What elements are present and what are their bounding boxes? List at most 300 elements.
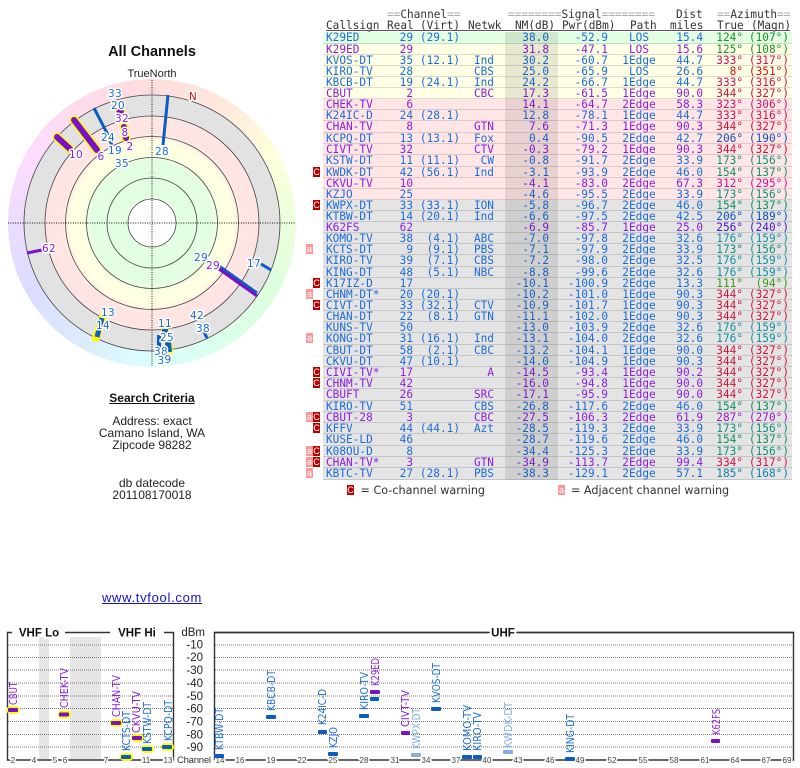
- row: KWDK-DT: (137°): [749, 166, 789, 179]
- row: CHNM-DT*: 20: [400, 288, 413, 301]
- row: KIRO-TV 51: -26.8: [516, 400, 549, 413]
- row: KZJO: [323, 189, 792, 200]
- row: KVOS-DT: [323, 55, 792, 66]
- row: CKVU-DT: -14.0: [516, 355, 549, 368]
- row: CIVI-TV*: 17: [400, 366, 413, 379]
- row: CIVT-DT: 344°: [716, 299, 743, 312]
- row: CIVI-TV*: -14.5: [516, 366, 549, 379]
- row: KBCB-DT: 19: [400, 76, 413, 89]
- row: KOMO-TV: [323, 233, 792, 244]
- dBm axis: [181, 627, 205, 754]
- row: K62FS: (240°): [749, 221, 789, 234]
- row: CBUT: CBUT: [326, 87, 353, 100]
- row: KSTW-DT: [323, 155, 792, 167]
- row: KUNS-TV: (159°): [749, 321, 789, 334]
- db datecode: [112, 476, 192, 502]
- row: KIRO-TV 51: 154°: [716, 400, 743, 413]
- row: KVOS-DT: 1Edge: [622, 54, 656, 67]
- row: CBUFT: 26: [400, 388, 413, 401]
- row: KING-DT: 2Edge: [622, 266, 656, 279]
- row: K29ED blue: [323, 32, 792, 44]
- row: K29ED purple: -47.1: [575, 43, 608, 56]
- station labels: KCPQ-DT: [162, 700, 175, 741]
- row: KFFV: 44: [400, 422, 413, 435]
- row: KBTC-TV: (168°): [749, 467, 789, 480]
- dBm axis: -20: [186, 652, 203, 664]
- channel axis: 4: [32, 756, 37, 765]
- row: KIRO-TV 39: 2Edge: [622, 254, 656, 267]
- row: KVOS-DT: 333°: [716, 54, 743, 67]
- row: KWPX-DT: (33.1): [420, 199, 460, 212]
- row: KOMO-TV: 2Edge: [622, 232, 656, 245]
- row: KSTW-DT: KSTW-DT: [326, 154, 373, 167]
- channel axis: 22: [298, 756, 307, 765]
- row: CKVU-TV: [323, 178, 792, 189]
- row: KIRO-TV 39: (159°): [749, 254, 789, 267]
- bar labels: 42: [190, 310, 204, 322]
- row: CBUT: 2: [406, 87, 413, 100]
- row: CIVT-TV: (327°): [749, 143, 789, 156]
- row: KTBW-DT: -97.5: [575, 210, 608, 223]
- bar labels: 38: [154, 346, 168, 358]
- row: KCPQ-DT: -90.5: [575, 132, 608, 145]
- row: KONG-DT: [323, 333, 792, 345]
- channel table: a: [307, 457, 312, 467]
- row: CHAN-TV*: GTN: [474, 456, 494, 469]
- row: CHEK-TV: 2Edge: [622, 98, 656, 111]
- channel table: a: [307, 289, 312, 299]
- row: CBUT-28: -27.5: [516, 411, 549, 424]
- row: KBCB-DT: 24.2: [522, 76, 549, 89]
- row: KUNS-TV: -13.0: [516, 321, 549, 334]
- row: KIRO-TV 39: 39: [400, 254, 413, 267]
- row: CBUT-28: -106.3: [568, 411, 608, 424]
- row: KCTS-DT: 9: [406, 243, 413, 256]
- row: KBCB-DT: Ind: [474, 76, 494, 89]
- row: CBUT: 90.0: [676, 87, 703, 100]
- bar labels: 28: [155, 146, 169, 158]
- row: CKVU-TV: -83.0: [575, 177, 608, 190]
- row: KUNS-TV: 176°: [716, 321, 743, 334]
- channel table: C: [313, 412, 320, 422]
- row: CIVI-TV*: 344°: [716, 366, 743, 379]
- row: CHAN-DT: 1Edge: [622, 310, 656, 323]
- row: KZJO: -4.6: [522, 188, 549, 201]
- table header: ========Signal========: [508, 8, 655, 21]
- dBm axis: -90: [186, 742, 203, 754]
- row: KWDK-DT: 154°: [716, 166, 743, 179]
- row: CHNM-TV: [323, 378, 792, 389]
- row: KWPX-DT: 46.0: [676, 199, 703, 212]
- row: KONG-DT: (159°): [749, 332, 789, 345]
- bar labels: 10: [69, 149, 83, 161]
- row: KSTW-DT: 2Edge: [622, 154, 656, 167]
- row: KIRO-TV 51: 51: [400, 400, 413, 413]
- db datecode: 201108170018: [112, 488, 192, 502]
- table header: Real: [387, 19, 414, 32]
- channel table: a: [307, 244, 312, 254]
- row: KWDK-DT: (56.1): [420, 166, 460, 179]
- row: CKVU-TV: (295°): [749, 177, 789, 190]
- row: CHNM-TV: 42: [400, 377, 413, 390]
- row: K17IZ-D: (94°): [756, 277, 789, 290]
- row: KWDK-DT: 46.0: [676, 166, 703, 179]
- row: CBUT: [323, 88, 792, 99]
- channel table: C: [313, 446, 320, 456]
- row: KVOS-DT: Ind: [474, 54, 494, 67]
- row: KIRO-TV 28: CBS: [474, 65, 494, 78]
- row: CHNM-TV: -94.8: [575, 377, 608, 390]
- station labels: CIVT-TV: [399, 690, 412, 727]
- channel axis: 25: [329, 756, 338, 765]
- row: KCPQ-DT: (190°): [749, 132, 789, 145]
- row: KWPX-DT: -5.8: [522, 199, 549, 212]
- row: CHAN-TV: 90.3: [676, 120, 703, 133]
- row: CIVT-TV: [323, 144, 792, 155]
- row: K24IC-D: 333°: [716, 109, 743, 122]
- row: CBUFT: CBUFT: [326, 388, 359, 401]
- row: CBUT-28: 61.9: [676, 411, 703, 424]
- row: KONG-DT: 176°: [716, 332, 743, 345]
- row: CHNM-TV: (327°): [749, 377, 789, 390]
- row: KCTS-DT: PBS: [474, 243, 494, 256]
- row: CIVT-DT: [323, 300, 792, 311]
- row: K62FS: 1Edge: [622, 221, 656, 234]
- row: CBUT-DT: 1Edge: [622, 344, 656, 357]
- row: CIVI-TV*: CIVI-TV*: [326, 366, 379, 379]
- table header: Dist: [676, 8, 703, 21]
- dBm axis: -80: [186, 730, 203, 742]
- row: K29ED blue: K29ED: [326, 31, 359, 44]
- row: K08OU-D: 2Edge: [622, 445, 656, 458]
- row: KCPQ-DT: 206°: [716, 132, 743, 145]
- row: CBUFT: -17.1: [516, 388, 549, 401]
- channel axis: 52: [608, 756, 617, 765]
- label: TrueNorth: TrueNorth: [127, 68, 177, 80]
- row: CKVU-DT: [323, 356, 792, 367]
- row: K29ED purple: 15.6: [676, 43, 703, 56]
- channel axis: 13: [164, 756, 173, 765]
- db datecode: db datecode: [119, 476, 185, 490]
- row: KUSE-LD: 46: [400, 433, 413, 446]
- row: KBTC-TV: 2Edge: [622, 467, 656, 480]
- row: KIRO-TV 28: 25.0: [522, 65, 549, 78]
- row: KING-DT: [323, 267, 792, 278]
- row: CBUT: 344°: [716, 87, 743, 100]
- row: KSTW-DT: 33.9: [676, 154, 703, 167]
- row: KONG-DT: Ind: [474, 332, 494, 345]
- row: CBUT-28: 287°: [716, 411, 743, 424]
- station labels: KZJO: [327, 727, 340, 748]
- bar labels: 11: [158, 318, 172, 330]
- bar labels: 32: [115, 113, 129, 125]
- row: KIRO-TV 39: -98.0: [575, 254, 608, 267]
- row: KSTW-DT: (156°): [749, 154, 789, 167]
- row: KTBW-DT: [323, 211, 792, 222]
- row: CKVU-DT: 47: [400, 355, 413, 368]
- table header: Netwk: [468, 19, 501, 32]
- row: CHAN-DT: [323, 311, 792, 322]
- station labels: KIRO-TV: [358, 672, 371, 710]
- row: KVOS-DT: (12.1): [420, 54, 460, 67]
- channel axis: 31: [391, 756, 400, 765]
- row: K24IC-D: [323, 110, 792, 121]
- bar labels: N: [189, 91, 197, 103]
- row: KCTS-DT: (9.1): [427, 243, 460, 256]
- row: KZJO: -95.5: [575, 188, 608, 201]
- row: KVOS-DT: (317°): [749, 54, 789, 67]
- row: KBCB-DT: (316°): [749, 76, 789, 89]
- row: KCTS-DT: -97.9: [575, 243, 608, 256]
- row: KBTC-TV: -38.3: [516, 467, 549, 480]
- row: KUSE-LD: -28.7: [516, 433, 549, 446]
- row: CHAN-TV*: 2Edge: [622, 456, 656, 469]
- row: KIRO-TV 39: -7.2: [522, 254, 549, 267]
- address block: Address: exact: [112, 414, 192, 428]
- row: K08OU-D: -125.3: [568, 445, 608, 458]
- row: KIRO-TV 51: KIRO-TV: [326, 400, 373, 413]
- row: K17IZ-D: [323, 278, 792, 289]
- row: CBUT: CBC: [474, 87, 494, 100]
- station markers: [121, 697, 575, 761]
- row: CHAN-TV: 8: [406, 120, 413, 133]
- link: tvfool: www.tvfool.com: [102, 590, 202, 605]
- row: KUNS-TV: KUNS-TV: [326, 321, 373, 334]
- row: CHAN-DT: 22: [400, 310, 413, 323]
- row: K24IC-D: 44.7: [676, 109, 703, 122]
- channel axis: 34: [422, 756, 431, 765]
- channel table: a: [307, 333, 312, 343]
- row: K17IZ-D: 17: [400, 277, 413, 290]
- row: KBCB-DT: KBCB-DT: [326, 76, 373, 89]
- row: KCPQ-DT: KCPQ-DT: [326, 132, 373, 145]
- row: CIVT-DT: CIVT-DT: [326, 299, 373, 312]
- row: CHAN-DT: 90.3: [676, 310, 703, 323]
- row: KIRO-TV 39: (7.1): [427, 254, 460, 267]
- row: CHEK-TV: 323°: [716, 98, 743, 111]
- NM column shading: [505, 32, 558, 480]
- row: KVOS-DT: -60.7: [575, 54, 608, 67]
- row: CHEK-TV: [323, 99, 792, 110]
- channel axis: 58: [670, 756, 679, 765]
- table header: True: [717, 19, 744, 32]
- band titles: [19, 628, 515, 640]
- row: CHNM-DT*: 1Edge: [622, 288, 656, 301]
- legend: co-channel warning: = Co-channel warning: [361, 484, 485, 497]
- row: K29ED blue: LOS: [629, 31, 649, 44]
- row: K17IZ-D: -10.1: [516, 277, 549, 290]
- row: KIRO-TV 39: 176°: [716, 254, 743, 267]
- row: K17IZ-D: 111°: [716, 277, 743, 290]
- station labels: KWPX-DT: [410, 708, 423, 749]
- row: CBUT-28: CBC: [474, 411, 494, 424]
- channel table: a: [307, 412, 312, 422]
- row: CHAN-TV: 7.6: [529, 120, 549, 133]
- row: K17IZ-D: K17IZ-D: [326, 277, 373, 290]
- dBm axis: -50: [186, 691, 203, 703]
- row: CBUFT: 90.0: [676, 388, 703, 401]
- row: K24IC-D: 12.8: [522, 109, 549, 122]
- row: K08OU-D: [323, 446, 792, 457]
- row: KIRO-TV 39: KIRO-TV: [326, 254, 373, 267]
- row: KOMO-TV: -97.8: [575, 232, 608, 245]
- row: CHEK-TV: 14.1: [522, 98, 549, 111]
- row: K29ED blue: 124°: [716, 31, 743, 44]
- row: KOMO-TV: 176°: [716, 232, 743, 245]
- row: KTBW-DT: (189°): [749, 210, 789, 223]
- signal bars: [27, 95, 271, 352]
- row: KUSE-LD: KUSE-LD: [326, 433, 373, 446]
- row: CBUT-DT: 344°: [716, 344, 743, 357]
- row: K29ED purple: 125°: [716, 43, 743, 56]
- row: KOMO-TV: (159°): [749, 232, 789, 245]
- row: CHEK-TV: CHEK-TV: [326, 98, 373, 111]
- row: CHNM-TV: CHNM-TV: [326, 377, 373, 390]
- row: KCPQ-DT: 13: [400, 132, 413, 145]
- row: K24IC-D: (28.1): [420, 109, 460, 122]
- row: CBUT-28: CBUT-28: [326, 411, 373, 424]
- row: K29ED blue: -52.9: [575, 31, 608, 44]
- row: KWDK-DT: -93.9: [575, 166, 608, 179]
- row: CIVI-TV*: 1Edge: [622, 366, 656, 379]
- channel table: C: [313, 423, 320, 433]
- row: CKVU-DT: 90.3: [676, 355, 703, 368]
- row: CHAN-TV*: -113.7: [568, 456, 608, 469]
- station labels: CHEK-TV: [58, 668, 71, 708]
- table header: ==Azimuth==: [717, 8, 790, 21]
- row: KWPX-DT: -96.7: [575, 199, 608, 212]
- row: CHEK-TV: (306°): [749, 98, 789, 111]
- bar labels: 19: [108, 145, 122, 157]
- row: KCTS-DT: (156°): [749, 243, 789, 256]
- row: KFFV: 173°: [716, 422, 743, 435]
- row: K29ED purple: K29ED: [326, 43, 359, 56]
- station labels: K24IC-D: [316, 689, 329, 725]
- row: KUNS-TV: [323, 322, 792, 333]
- row: KCPQ-DT: (13.1): [420, 132, 460, 145]
- dBm axis: -60: [186, 704, 203, 716]
- row: CIVT-DT: -101.7: [568, 299, 608, 312]
- row: KIRO-TV 28: 26.6: [676, 65, 703, 78]
- row: CHNM-DT*: [323, 289, 792, 300]
- row: KIRO-TV 51: (137°): [749, 400, 789, 413]
- channel table: C: [313, 457, 320, 467]
- row: CBUT-28: (270°): [749, 411, 789, 424]
- row: KTBW-DT: (20.1): [420, 210, 460, 223]
- row: CBUT: (327°): [749, 87, 789, 100]
- row: K62FS: 25.0: [676, 221, 703, 234]
- bar labels: 20: [111, 100, 125, 112]
- row: CIVT-DT: CTV: [474, 299, 494, 312]
- row: KWPX-DT: KWPX-DT: [326, 199, 373, 212]
- bar labels: 24: [101, 132, 115, 144]
- address block: Zipcode 98282: [112, 438, 192, 452]
- dBm axis: dBm: [181, 627, 205, 639]
- row: KIRO-TV 51: 46.0: [676, 400, 703, 413]
- row: K29ED blue: 29: [400, 31, 413, 44]
- row: KFFV: (44.1): [420, 422, 460, 435]
- table header: Pwr(dBm): [562, 19, 615, 32]
- row: CHAN-TV*: 99.4: [676, 456, 703, 469]
- row: CHAN-DT: -11.1: [516, 310, 549, 323]
- bar labels: 3: [158, 355, 164, 367]
- row: KWPX-DT: 2Edge: [622, 199, 656, 212]
- row: K24IC-D: 24: [400, 109, 413, 122]
- row: KOMO-TV: 32.6: [676, 232, 703, 245]
- bar labels: 29: [194, 252, 208, 264]
- channel axis: 37: [452, 756, 461, 765]
- row: CHEK-TV: 6: [406, 98, 413, 111]
- row: KIRO-TV 51: [323, 401, 792, 412]
- row: KONG-DT: 31: [400, 332, 413, 345]
- row: CHAN-TV*: -34.9: [516, 456, 549, 469]
- row: KSTW-DT: 173°: [716, 154, 743, 167]
- row: K24IC-D: 1Edge: [622, 109, 656, 122]
- row: KONG-DT: -104.0: [568, 332, 608, 345]
- row: KVOS-DT: 44.7: [676, 54, 703, 67]
- spectrum chart: Channel: [177, 755, 211, 766]
- row: KOMO-TV: KOMO-TV: [326, 232, 373, 245]
- row: K29ED blue: (29.1): [420, 31, 460, 44]
- channel axis: 14: [216, 756, 225, 765]
- row: KING-DT: (5.1): [427, 266, 460, 279]
- station labels: KWDK-DT: [502, 702, 515, 748]
- station labels: KCTS-DT: [120, 711, 133, 751]
- row: K08OU-D: 173°: [716, 445, 743, 458]
- row: KUNS-TV: 50: [400, 321, 413, 334]
- row: CKVU-DT: (327°): [749, 355, 789, 368]
- row: KING-DT: -99.6: [575, 266, 608, 279]
- row: KCTS-DT: -7.1: [522, 243, 549, 256]
- channel axis: 43: [514, 756, 523, 765]
- row: CIVT-TV: CIVT-TV: [326, 143, 373, 156]
- channel axis: 55: [639, 756, 648, 765]
- row: KIRO-TV 39: CBS: [474, 254, 494, 267]
- row: KUSE-LD: -119.6: [568, 433, 608, 446]
- channel axis: 67: [762, 756, 771, 765]
- row: KBCB-DT: 44.7: [676, 76, 703, 89]
- table header: Callsign: [326, 19, 379, 32]
- row: CIVT-TV: 344°: [716, 143, 743, 156]
- row: CBUFT: 1Edge: [622, 388, 656, 401]
- row: CKVU-TV: CKVU-TV: [326, 177, 373, 190]
- row: CIVT-DT: 33: [400, 299, 413, 312]
- row: CKVU-DT: (10.1): [420, 355, 460, 368]
- row: CIVT-TV: CTV: [474, 143, 494, 156]
- row: KIRO-TV 28: 8°: [730, 65, 743, 78]
- row: KIRO-TV 28: LOS: [629, 65, 649, 78]
- row: KTBW-DT: 2Edge: [622, 210, 656, 223]
- row: KSTW-DT: -91.7: [575, 154, 608, 167]
- address block: [99, 414, 206, 452]
- row: K29ED blue: (107°): [749, 31, 789, 44]
- row: KWPX-DT: 33: [400, 199, 413, 212]
- row: K08OU-D: 33.9: [676, 445, 703, 458]
- row: KONG-DT: (16.1): [420, 332, 460, 345]
- bar labels: 9: [165, 354, 171, 366]
- channel table: a: [307, 468, 312, 478]
- row: CKVU-DT: -104.9: [568, 355, 608, 368]
- channel table: C: [313, 367, 320, 377]
- row: KWPX-DT: [323, 200, 792, 211]
- row: CKVU-TV: 2Edge: [622, 177, 656, 190]
- row: CBUFT: (327°): [749, 388, 789, 401]
- row: KONG-DT: 2Edge: [622, 332, 656, 345]
- row: KUSE-LD: [323, 434, 792, 446]
- row: KCPQ-DT: 42.7: [676, 132, 703, 145]
- table header: [326, 8, 791, 32]
- row: KONG-DT: KONG-DT: [326, 332, 373, 345]
